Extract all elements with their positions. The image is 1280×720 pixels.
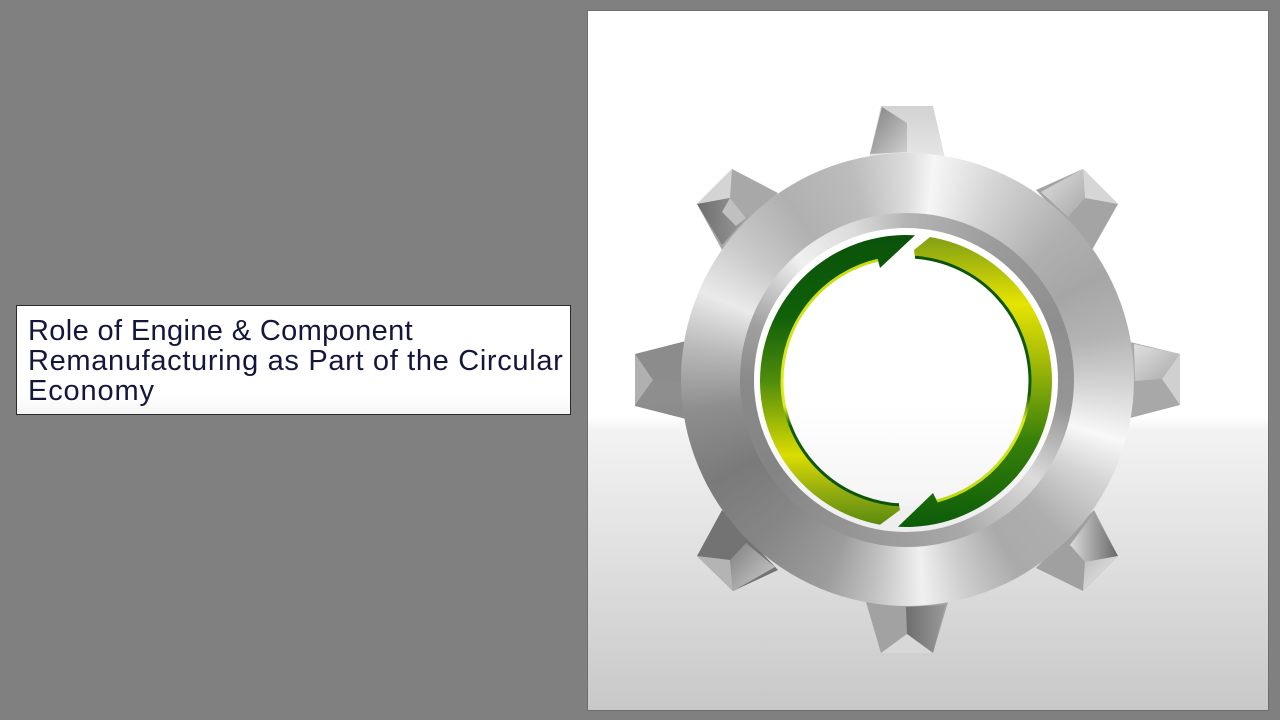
title box: Remanufacturing as Part of the Circular [28, 345, 563, 377]
panel: gear illustration [588, 11, 1268, 710]
title box: Role of Engine & Component [28, 315, 413, 347]
tooth: bottom right [1036, 510, 1118, 591]
tooth: top [869, 106, 945, 158]
centre circle [782, 257, 1030, 505]
inner grey ring [740, 213, 1074, 547]
title box [16, 305, 571, 415]
tooth: top left [697, 169, 778, 250]
tooth: top right [1036, 169, 1118, 250]
inner white disc [754, 228, 1058, 532]
gear body ring [681, 153, 1134, 606]
arrow: right, pointing to bottom [898, 237, 1052, 527]
tooth: left [635, 341, 686, 419]
arrow: left, pointing to top [760, 235, 915, 525]
tooth: bottom left [697, 510, 778, 591]
tooth: bottom [866, 602, 948, 653]
title box: Economy [28, 375, 155, 407]
tooth: right [1130, 342, 1180, 418]
